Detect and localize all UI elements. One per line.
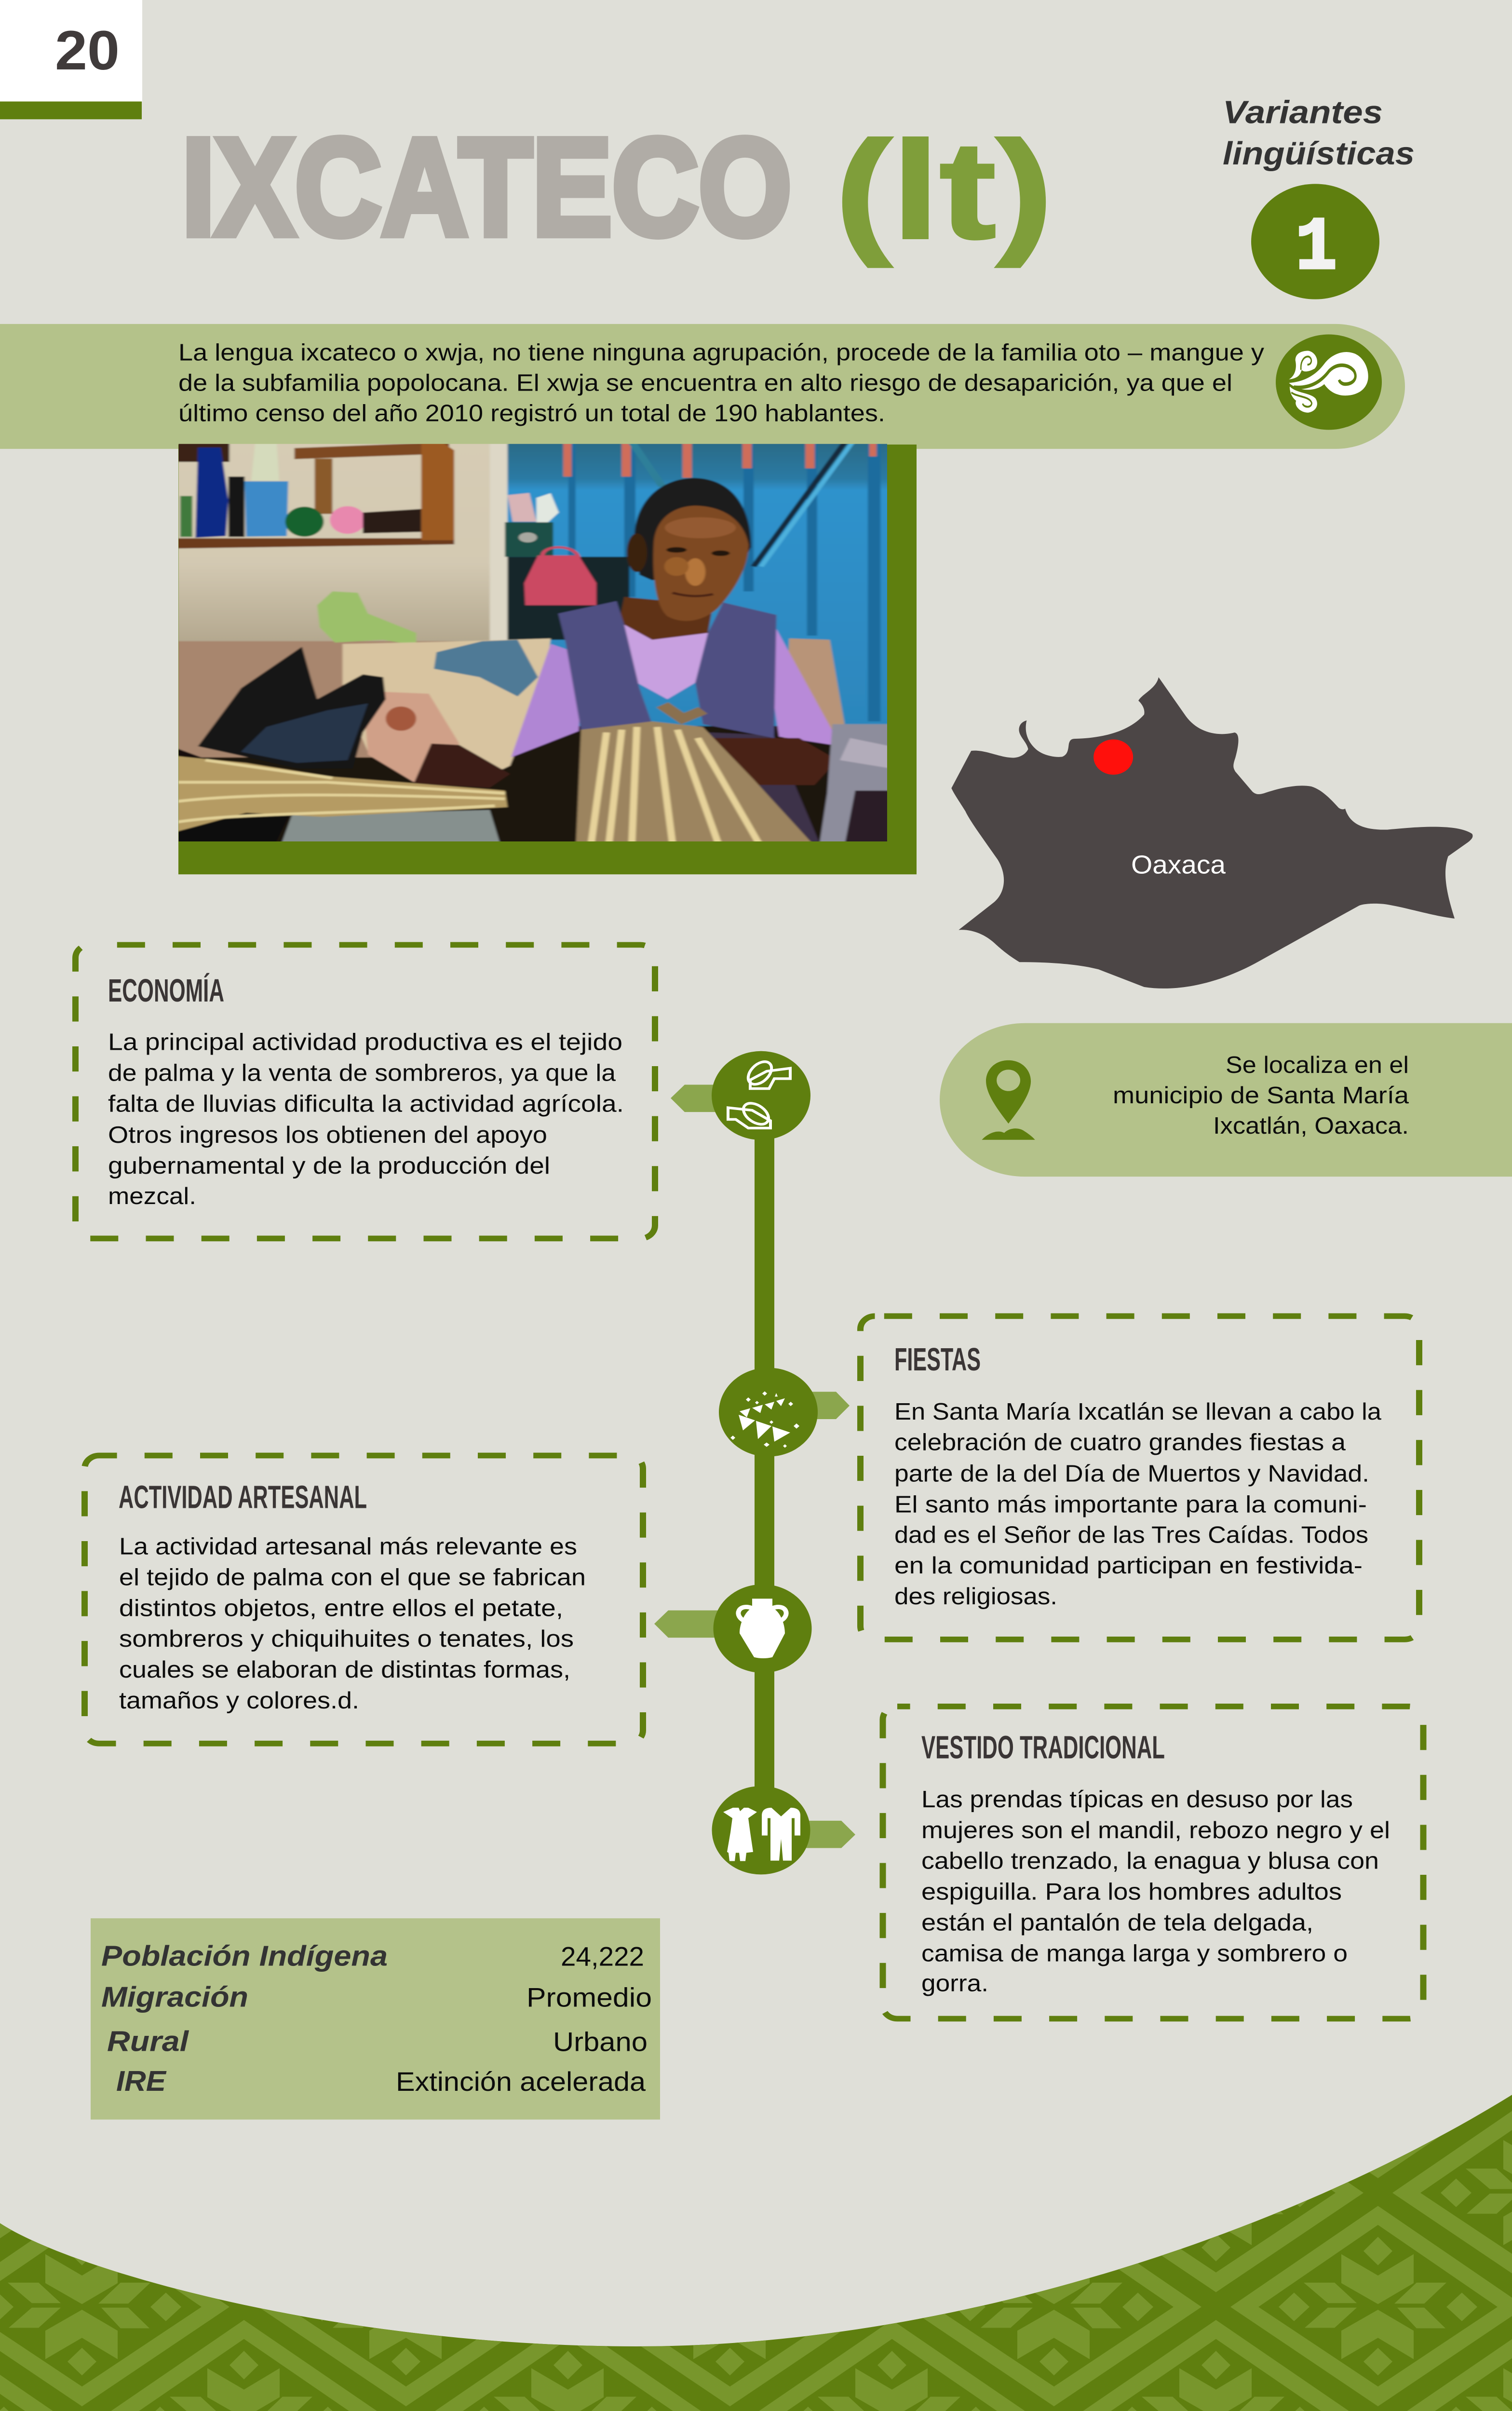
stats table: Migración xyxy=(101,1981,248,2013)
panel: fiestas: celebración de cuatro grandes fiestas a xyxy=(894,1429,1346,1456)
panel: economía: de palma y la venta de sombreros, ya que la xyxy=(108,1060,616,1086)
title: (lt) xyxy=(835,113,1053,269)
panel: fiestas: El santo más importante para la comuni- xyxy=(894,1491,1367,1518)
panel: vestido tradicional: Las prendas típicas en desuso por las xyxy=(921,1786,1353,1813)
panel: fiestas: dad es el Señor de las Tres Caídas. Todos xyxy=(894,1522,1368,1548)
variants counter xyxy=(1223,94,1415,299)
stats table: Promedio xyxy=(526,1983,652,2013)
stats table: Rural xyxy=(107,2026,189,2058)
panel: economía: ECONOMÍA xyxy=(108,972,224,1008)
panel: actividad artesanal: ACTIVIDAD ARTESANAL xyxy=(119,1479,367,1515)
photo: woman weaving palm xyxy=(175,442,891,843)
location pill: Se localiza en el xyxy=(1226,1052,1409,1079)
icon: hands with coins xyxy=(728,1058,790,1128)
intro banner xyxy=(0,324,1405,449)
stats table: IRE xyxy=(116,2065,167,2097)
panel: economía: falta de lluvias dificulta la actividad agrícola. xyxy=(108,1091,624,1117)
variants counter: Variantes xyxy=(1223,94,1383,130)
panel: vestido tradicional: cabello trenzado, la enagua y blusa con xyxy=(921,1848,1379,1874)
panel: actividad artesanal: cuales se elaboran de distintas formas, xyxy=(119,1657,570,1683)
panel: economía xyxy=(75,945,655,1238)
panel: fiestas xyxy=(860,1316,1419,1639)
panel: vestido tradicional: VESTIDO TRADICIONAL xyxy=(921,1729,1165,1765)
panel: actividad artesanal: distintos objetos, entre ellos el petate, xyxy=(119,1595,563,1622)
panel: vestido tradicional: están el pantalón de tela delgada, xyxy=(921,1910,1313,1936)
timeline xyxy=(654,1051,855,1874)
panel: economía: gubernamental y de la producción del xyxy=(108,1152,550,1179)
panel: fiestas: FIESTAS xyxy=(894,1341,981,1377)
location pill xyxy=(940,1023,1512,1177)
panel: actividad artesanal: La actividad artesanal más relevante es xyxy=(119,1533,577,1560)
icon: clay jar xyxy=(738,1598,786,1658)
stats table xyxy=(91,1918,660,2120)
panel: actividad artesanal: tamaños y colores.d. xyxy=(119,1687,359,1714)
panel: actividad artesanal xyxy=(85,1456,643,1744)
panel: economía: mezcal. xyxy=(108,1183,196,1209)
icon: traditional clothing xyxy=(723,1808,800,1861)
variants counter: 1 xyxy=(1296,206,1337,291)
panel: vestido tradicional xyxy=(883,1707,1423,2018)
stats table: 24,222 xyxy=(561,1942,644,1972)
panel: economía: Otros ingresos los obtienen del apoyo xyxy=(108,1122,547,1148)
map of Oaxaca xyxy=(951,677,1472,989)
stats table: Población Indígena xyxy=(101,1940,388,1972)
variants counter: lingüísticas xyxy=(1223,135,1415,171)
panel: fiestas: des religiosas. xyxy=(894,1584,1057,1610)
icon: festive bunting xyxy=(730,1391,799,1448)
panel: vestido tradicional: mujeres son el mandil, rebozo negro y el xyxy=(921,1817,1390,1843)
panel: actividad artesanal: el tejido de palma con el que se fabrican xyxy=(119,1564,586,1591)
panel: vestido tradicional: camisa de manga larga y sombrero o xyxy=(921,1940,1348,1967)
panel: vestido tradicional: gorra. xyxy=(921,1970,988,1997)
page number tab xyxy=(0,0,142,119)
intro banner: de la subfamilia popolocana. El xwja se encuentra en alto riesgo de desaparición, ya que el xyxy=(178,370,1232,396)
footer woven pattern xyxy=(0,2095,1512,2411)
intro banner: La lengua ixcateco o xwja, no tiene ninguna agrupación, procede de la familia oto – mangue y xyxy=(178,339,1265,366)
title: IXCATECO xyxy=(182,110,792,264)
intro banner: último censo del año 2010 registró un total de 190 hablantes. xyxy=(178,400,885,427)
panel: fiestas: en la comunidad participan en festivida- xyxy=(894,1553,1363,1579)
page number tab: 20 xyxy=(55,19,120,81)
panel: economía: La principal actividad productiva es el tejido xyxy=(108,1029,622,1056)
panel: vestido tradicional: espiguilla. Para los hombres adultos xyxy=(921,1879,1342,1905)
stats table: Extinción acelerada xyxy=(396,2067,646,2097)
location pill: municipio de Santa María xyxy=(1113,1083,1409,1109)
stats table: Urbano xyxy=(553,2027,648,2057)
location pill: Ixcatlán, Oaxaca. xyxy=(1213,1113,1409,1139)
panel: fiestas: En Santa María Ixcatlán se llevan a cabo la xyxy=(894,1398,1382,1425)
photo frame xyxy=(178,445,917,874)
map of Oaxaca: Oaxaca xyxy=(1131,850,1226,880)
panel: actividad artesanal: sombreros y chiquihuites o tenates, los xyxy=(119,1626,574,1652)
panel: fiestas: parte de la del Día de Muertos y Navidad. xyxy=(894,1461,1369,1487)
